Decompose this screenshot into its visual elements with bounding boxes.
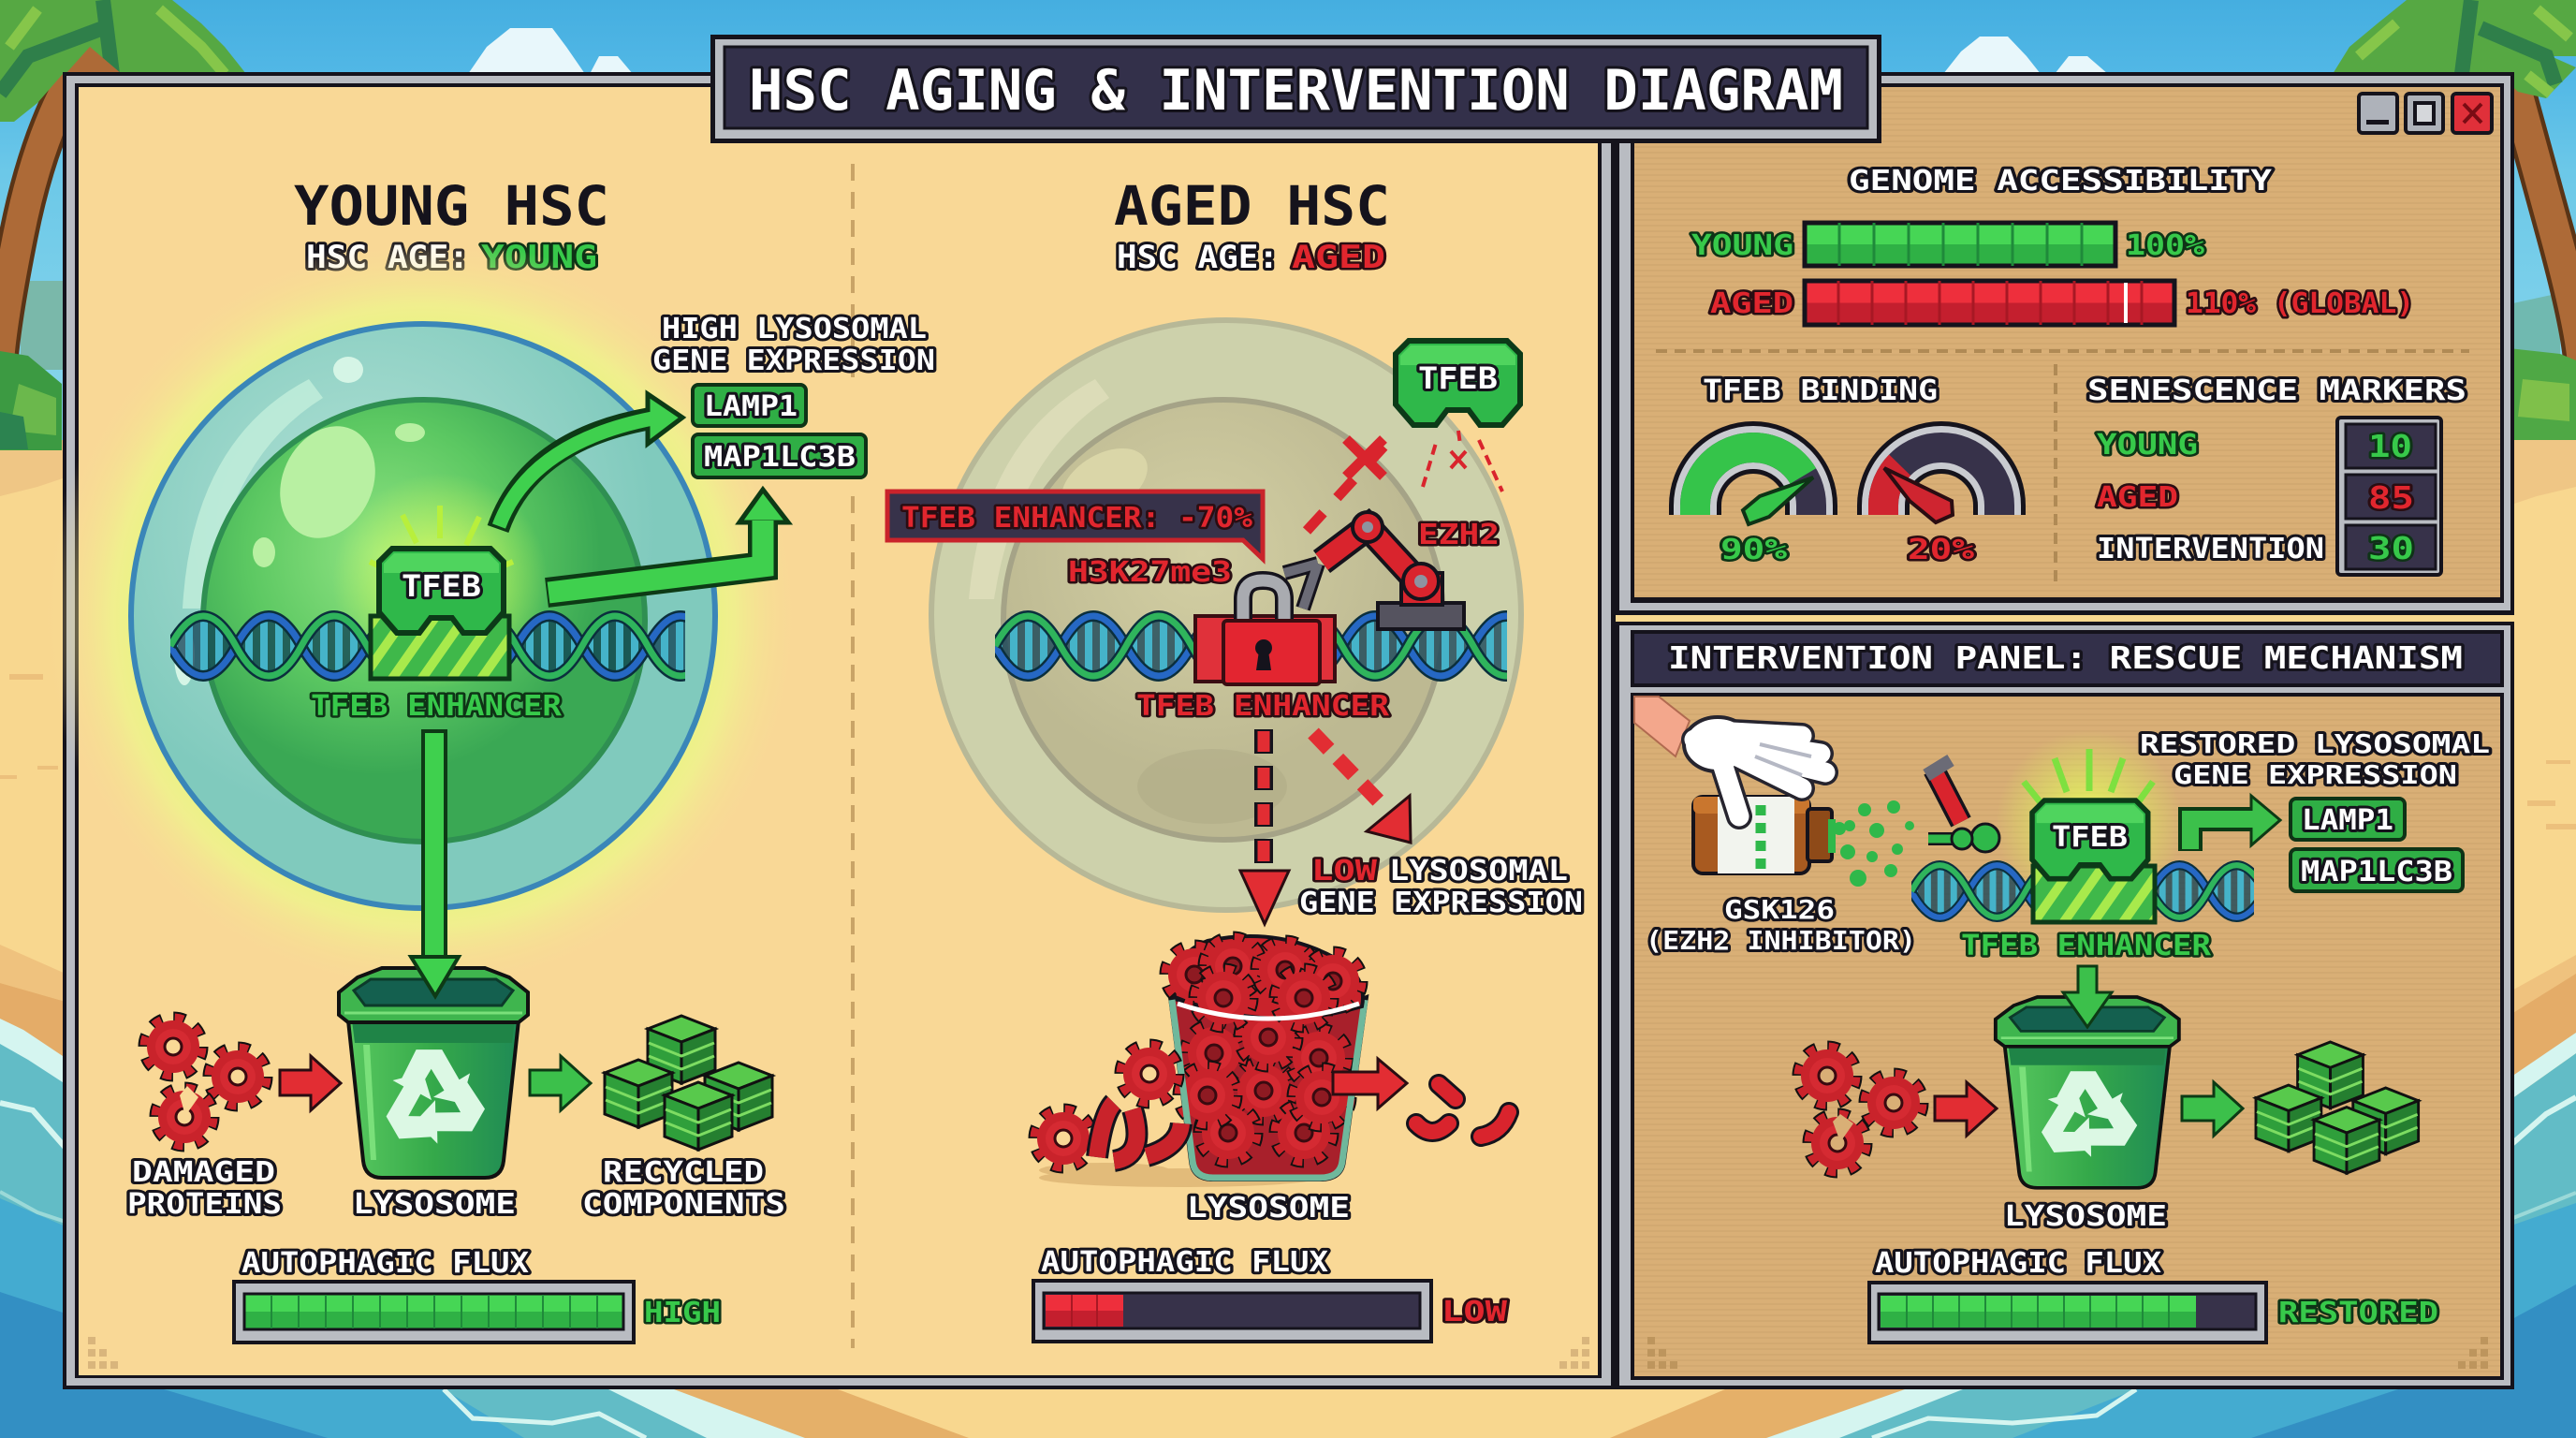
label: HSC age young: YOUNG bbox=[481, 239, 597, 276]
table: senescence markers: 85 bbox=[2368, 479, 2414, 516]
meter: autophagic flux restored: AUTOPHAGIC FLUX bbox=[1875, 1247, 2161, 1280]
label: high lysosomal gene expression: GENE EXPRESSION bbox=[652, 345, 935, 377]
diagram: young cell bbox=[44, 237, 802, 995]
table: senescence markers: INTERVENTION bbox=[2097, 533, 2324, 565]
label: restored lysosomal gene expression bbox=[2140, 728, 2490, 790]
label: TFEB enhancer young: TFEB ENHANCER bbox=[311, 690, 563, 723]
table: senescence markers: AGED bbox=[2097, 481, 2178, 514]
table: senescence markers bbox=[2097, 418, 2441, 575]
tag: LAMP1 bbox=[693, 385, 806, 426]
meter: autophagic flux restored bbox=[1869, 1247, 2438, 1343]
arrow: enhancer to lysosome bbox=[411, 731, 459, 996]
label: low lysosomal gene expression: GENE EXPRESSION bbox=[1299, 887, 1583, 919]
arrow: TFEB to MAP1LC3B bbox=[547, 490, 788, 593]
tag: LAMP1 rescued: LAMP1 bbox=[2302, 804, 2393, 837]
icon: right palm tree bbox=[2333, 0, 2576, 440]
arrow: dashed down to lysosome bbox=[1240, 729, 1289, 924]
label: GSK126 EZH2 inhibitor bbox=[1646, 894, 1916, 956]
icon: DNA strand with lock (aged) bbox=[995, 580, 1801, 684]
icon: spilled damaged proteins bbox=[1035, 1046, 1181, 1178]
meter: autophagic flux aged: AUTOPHAGIC FLUX bbox=[1041, 1246, 1328, 1279]
icon: recycled components rescued bbox=[2256, 1042, 2419, 1173]
header: intervention panel bbox=[1632, 632, 2502, 685]
window buttons bbox=[2359, 94, 2492, 133]
icon: inhibitor particles bbox=[1833, 800, 1914, 887]
callout: TFEB enhancer -70% bbox=[887, 492, 1263, 559]
tag: LAMP1 rescued bbox=[2291, 799, 2405, 840]
bar: aged genome accessibility: AGED bbox=[1710, 287, 1793, 320]
label: lysosome rescued: LYSOSOME bbox=[2004, 1200, 2167, 1233]
icon: DNA strand with TFEB bound (young): TFEB bbox=[402, 568, 481, 604]
diagram: aged cell bbox=[931, 320, 1521, 910]
label: high lysosomal gene expression bbox=[652, 313, 935, 377]
label: high lysosomal gene expression: HIGH LYSOSOMAL bbox=[662, 313, 927, 345]
table: senescence markers: 30 bbox=[2368, 530, 2414, 566]
meter: autophagic flux young bbox=[234, 1247, 721, 1343]
panel: right top window frame bbox=[1616, 72, 2514, 615]
label: H3K27me3: H3K27me3 bbox=[1068, 556, 1232, 589]
label: GSK126 EZH2 inhibitor: (EZH2 INHIBITOR) bbox=[1646, 925, 1916, 956]
label: low lysosomal gene expression: LOW bbox=[1311, 855, 1378, 888]
label: EZH2: EZH2 bbox=[1418, 519, 1500, 551]
arrow: damaged to lysosome rescued bbox=[1935, 1082, 1997, 1136]
tag: MAP1LC3B rescued bbox=[2291, 849, 2463, 891]
arrow: dashed to low expression bbox=[1313, 733, 1411, 843]
meter: autophagic flux young: HIGH bbox=[644, 1297, 721, 1329]
icon: blocked binding marks bbox=[1307, 431, 1502, 531]
gauge: young 90%: 90% bbox=[1720, 534, 1787, 566]
arrow: jar to fragments bbox=[1333, 1059, 1407, 1108]
arrow: lysosome to recycled bbox=[530, 1056, 591, 1110]
divider lines bbox=[1656, 351, 2469, 587]
label: recycled components bbox=[582, 1156, 785, 1221]
label: lysosome young: LYSOSOME bbox=[353, 1188, 516, 1221]
icon: blocked TFEB bbox=[1396, 341, 1520, 425]
meter: autophagic flux restored: RESTORED bbox=[2278, 1297, 2438, 1329]
icon: protein fragments bbox=[1416, 1084, 1509, 1137]
icon: lysosome bin rescued bbox=[1996, 997, 2179, 1188]
bar: young genome accessibility: 100% bbox=[2126, 229, 2204, 262]
heading: aged HSC: AGED HSC bbox=[1114, 174, 1390, 238]
label: recycled components: COMPONENTS bbox=[582, 1188, 785, 1221]
icon: DNA strand with TFEB bound (young) bbox=[170, 549, 975, 679]
arrow: damaged proteins to lysosome bbox=[280, 1056, 341, 1110]
icon: blocked TFEB: TFEB bbox=[1418, 360, 1498, 396]
gauge: aged 20% bbox=[1883, 448, 1999, 566]
panel: right bottom window frame bbox=[1616, 622, 2514, 1389]
label: TFEB enhancer aged: TFEB ENHANCER bbox=[1136, 690, 1390, 723]
bar: young genome accessibility: YOUNG bbox=[1691, 229, 1793, 262]
label: HSC age aged: AGED bbox=[1292, 239, 1385, 276]
label: TFEB enhancer rescued: TFEB ENHANCER bbox=[1961, 930, 2212, 962]
icon: left palm tree bbox=[0, 0, 246, 450]
label: HSC age aged: HSC AGE: bbox=[1117, 239, 1279, 276]
icon: damaged proteins rescued bbox=[1799, 1048, 1922, 1171]
label: low lysosomal gene expression: LYSOSOMAL bbox=[1389, 855, 1568, 888]
bar: aged genome accessibility: 110% (GLOBAL) bbox=[2186, 287, 2414, 320]
tag: MAP1LC3B: MAP1LC3B bbox=[704, 441, 856, 474]
callout: TFEB enhancer -70%: TFEB ENHANCER: -70% bbox=[901, 502, 1252, 535]
label: GSK126 EZH2 inhibitor: GSK126 bbox=[1724, 894, 1835, 925]
icon: inhibited EZH2 arm bbox=[1926, 760, 1999, 852]
icon: damaged proteins bbox=[145, 1019, 266, 1145]
label: restored lysosomal gene expression: GENE EXPRESSION bbox=[2174, 759, 2457, 790]
panel: main comparison window frame bbox=[63, 72, 1616, 1389]
arrow: enhancer to lysosome rescued bbox=[2063, 966, 2112, 1027]
corner dots bbox=[88, 1337, 2488, 1369]
heading: TFEB binding: TFEB BINDING bbox=[1703, 374, 1938, 407]
tag: MAP1LC3B rescued: MAP1LC3B bbox=[2301, 856, 2452, 888]
label: damaged proteins: PROTEINS bbox=[127, 1188, 282, 1221]
meter: autophagic flux aged bbox=[1033, 1246, 1508, 1342]
table: senescence markers: YOUNG bbox=[2097, 429, 2198, 462]
label: restored lysosomal gene expression: RESTORED LYSOSOMAL bbox=[2140, 728, 2490, 759]
arrow: lysosome to recycled rescued bbox=[2182, 1082, 2243, 1136]
label: damaged proteins: DAMAGED bbox=[132, 1156, 275, 1189]
icon: gloved hand holding GSK126 bottle bbox=[1634, 697, 1836, 873]
header: intervention panel: INTERVENTION PANEL: RESCUE MECHANISM bbox=[1668, 639, 2463, 676]
table: senescence markers: 10 bbox=[2368, 428, 2412, 464]
icon: recycled components bbox=[605, 1016, 772, 1150]
arrow: TFEB to restored genes bbox=[2190, 796, 2280, 851]
icon: overflowing lysosome jar bbox=[1039, 936, 1367, 1187]
bar: aged genome accessibility bbox=[1710, 281, 2414, 325]
heading: genome accessibility: GENOME ACCESSIBILITY bbox=[1849, 165, 2272, 198]
tag: LAMP1: LAMP1 bbox=[704, 390, 798, 423]
meter: autophagic flux young: AUTOPHAGIC FLUX bbox=[242, 1247, 529, 1280]
label: recycled components: RECYCLED bbox=[603, 1156, 764, 1189]
arrow: TFEB to LAMP1 bbox=[498, 394, 682, 529]
title bar: HSC AGING & INTERVENTION DIAGRAM bbox=[749, 58, 1843, 124]
icon: rescued TFEB on DNA: TFEB bbox=[2052, 821, 2128, 854]
divider bbox=[851, 164, 855, 1348]
tag: MAP1LC3B bbox=[693, 434, 866, 477]
label: HSC age aged bbox=[1117, 239, 1385, 276]
label: low lysosomal gene expression bbox=[1299, 855, 1583, 919]
gauge: aged 20%: 20% bbox=[1908, 534, 1974, 566]
label: HSC age young: HSC AGE: bbox=[306, 239, 469, 276]
gauge: young 90% bbox=[1695, 448, 1813, 566]
meter: autophagic flux aged: LOW bbox=[1442, 1296, 1508, 1328]
heading: young HSC: YOUNG HSC bbox=[294, 174, 609, 238]
bar: young genome accessibility bbox=[1691, 223, 2204, 266]
icon: rescued TFEB on DNA bbox=[1911, 730, 2550, 922]
icon: lysosome bin young bbox=[339, 968, 528, 1178]
label: lysosome aged: LYSOSOME bbox=[1187, 1192, 1350, 1225]
heading: senescence markers: SENESCENCE MARKERS bbox=[2087, 374, 2466, 407]
clouds bbox=[468, 28, 2108, 74]
label: damaged proteins bbox=[127, 1156, 282, 1221]
title bar bbox=[710, 35, 1881, 143]
icon: EZH2 robot arm bbox=[1284, 512, 1464, 629]
label: HSC age young bbox=[306, 239, 597, 276]
